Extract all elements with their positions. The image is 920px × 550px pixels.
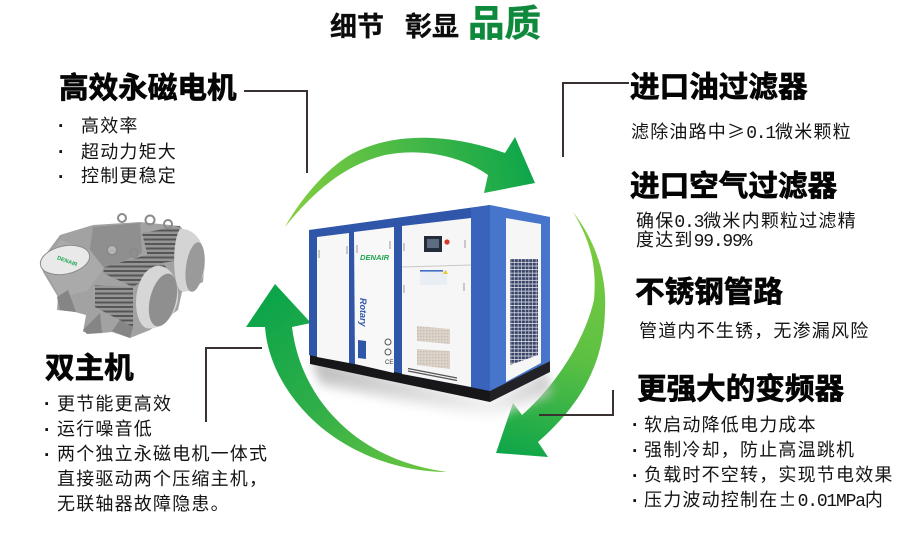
motor illustration: DENAIR (56, 255, 78, 268)
nameplate text (408, 368, 457, 380)
panel: air inlet filter: 度达到99.99% (636, 230, 753, 252)
panel: permanent magnet motor: 控制更稳定 (81, 166, 177, 188)
panel: twin airend: 无联轴器故障隐患。 (57, 494, 230, 516)
panel: twin airend: 运行噪音低 (57, 419, 153, 441)
panel: permanent magnet motor: · (55, 115, 66, 137)
door handles (319, 240, 465, 293)
logo: DENAIR (360, 253, 390, 262)
panel: stainless pipe (635, 276, 869, 343)
panel: permanent magnet motor: · (55, 166, 66, 188)
panel: inverter: 强制冷却，防止高温跳机 (644, 440, 855, 462)
volute (43, 240, 104, 297)
arrow: top (285, 137, 535, 227)
middle door (354, 227, 394, 373)
silhouette (40, 222, 205, 338)
panel: air inlet filter (630, 170, 857, 252)
vents (417, 326, 450, 344)
panel: twin airend: · (41, 419, 52, 441)
panel: stainless pipe: 不锈钢管路 (635, 276, 783, 309)
central housing (88, 223, 142, 272)
panel: twin airend: 直接驱动两个压缩主机， (57, 469, 268, 491)
panel: inverter: 压力波动控制在±0.01MPa内 (644, 486, 884, 512)
panel: inverter: 更强大的变频器 (637, 373, 845, 406)
panel: oil inlet filter (630, 71, 852, 144)
panel: inverter (629, 373, 894, 512)
rotary label (358, 296, 368, 359)
panel: oil inlet filter: 滤除油路中≥0.1微米颗粒 (631, 118, 852, 144)
panel: permanent magnet motor: 高效率 (81, 116, 139, 138)
title: 细节 (330, 12, 384, 42)
panel: twin airend: 两个独立永磁电机一体式 (57, 444, 268, 466)
control panel (424, 236, 442, 252)
floor shadow (312, 360, 552, 420)
panel: inverter: 负载时不空转，实现节电效果 (644, 465, 894, 487)
front end cap (136, 266, 178, 328)
panel: twin airend: · (41, 444, 52, 466)
panel: air inlet filter: 确保0.3微米内颗粒过滤精 (636, 211, 857, 233)
rear end cap (174, 229, 205, 292)
title: 彰显 (405, 12, 459, 42)
certification marks (385, 339, 393, 366)
base (310, 355, 490, 402)
title: 品质 (468, 3, 541, 44)
panel: inverter: · (629, 490, 640, 512)
right door (402, 218, 471, 387)
panel: inverter: 软启动降低电力成本 (644, 415, 817, 437)
compressor machine (309, 205, 552, 420)
panel: inverter: · (629, 440, 640, 462)
panel: inverter: · (629, 414, 640, 436)
arrow: left (246, 284, 447, 472)
cabinet front (309, 205, 490, 391)
panel: stainless pipe: 管道内不生锈，无渗漏风险 (639, 321, 869, 343)
panel: permanent magnet motor: · (55, 141, 66, 163)
panel: twin airend: 双主机 (45, 352, 134, 385)
panel: permanent magnet motor (55, 72, 237, 188)
panel: air inlet filter: 进口空气过滤器 (630, 170, 838, 203)
panel: permanent magnet motor: 超动力矩大 (81, 142, 177, 164)
side panel and grille (506, 218, 541, 382)
lifting eyes (118, 214, 126, 222)
panel: oil inlet filter: 进口油过滤器 (630, 71, 808, 104)
rotary label: Rotary (358, 298, 368, 328)
left door (317, 233, 349, 363)
panel: inverter: · (629, 465, 640, 487)
motor illustration (38, 214, 207, 338)
arrow: right (496, 212, 605, 457)
leader lines (206, 83, 629, 422)
cabinet side (490, 205, 550, 391)
feet (57, 290, 76, 312)
panel: twin airend: · (41, 393, 52, 415)
front motor top fins (103, 253, 166, 287)
title (330, 3, 541, 44)
front motor lower fins (95, 285, 133, 327)
panel: twin airend (41, 352, 268, 516)
warning label (420, 270, 448, 285)
panel: twin airend: 更节能更高效 (57, 394, 172, 416)
panel: permanent magnet motor: 高效永磁电机 (59, 72, 237, 105)
flange plate (38, 241, 92, 279)
front right strip (471, 205, 490, 391)
rear motor fins (142, 226, 180, 265)
certification marks: CE (385, 360, 393, 366)
circular green arrows (246, 137, 605, 472)
